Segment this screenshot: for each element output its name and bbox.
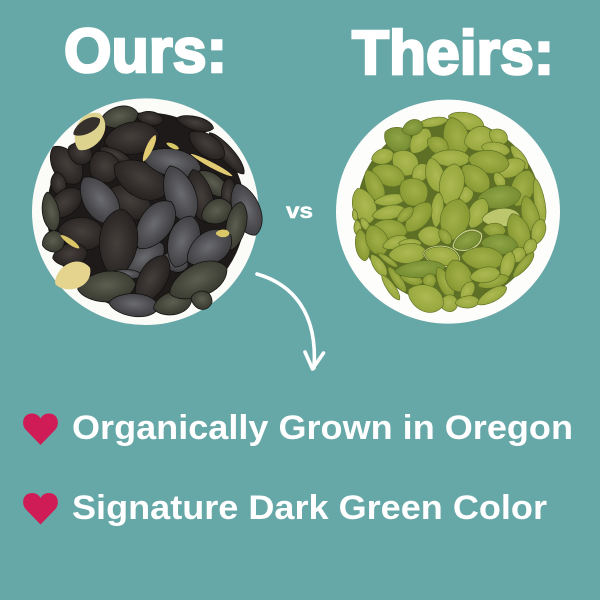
text: Organically Grown in Oregon: Organically Grown in Oregon <box>72 409 573 447</box>
heading: Theirs: Theirs: <box>352 19 554 88</box>
label: vs: vs <box>286 200 313 223</box>
icon: heart 1 <box>23 414 58 445</box>
text: Signature Dark Green Color: Signature Dark Green Color <box>72 489 547 527</box>
bowl: green pumpkin seeds (theirs) <box>336 100 560 324</box>
bowl: dark pumpkin seeds (ours) <box>32 98 268 325</box>
yellow exposed seed fragments <box>50 107 234 296</box>
heading: Ours: Ours: <box>64 17 227 86</box>
icon: heart 2 <box>23 493 58 524</box>
arrow: curved pointing down <box>257 274 324 369</box>
